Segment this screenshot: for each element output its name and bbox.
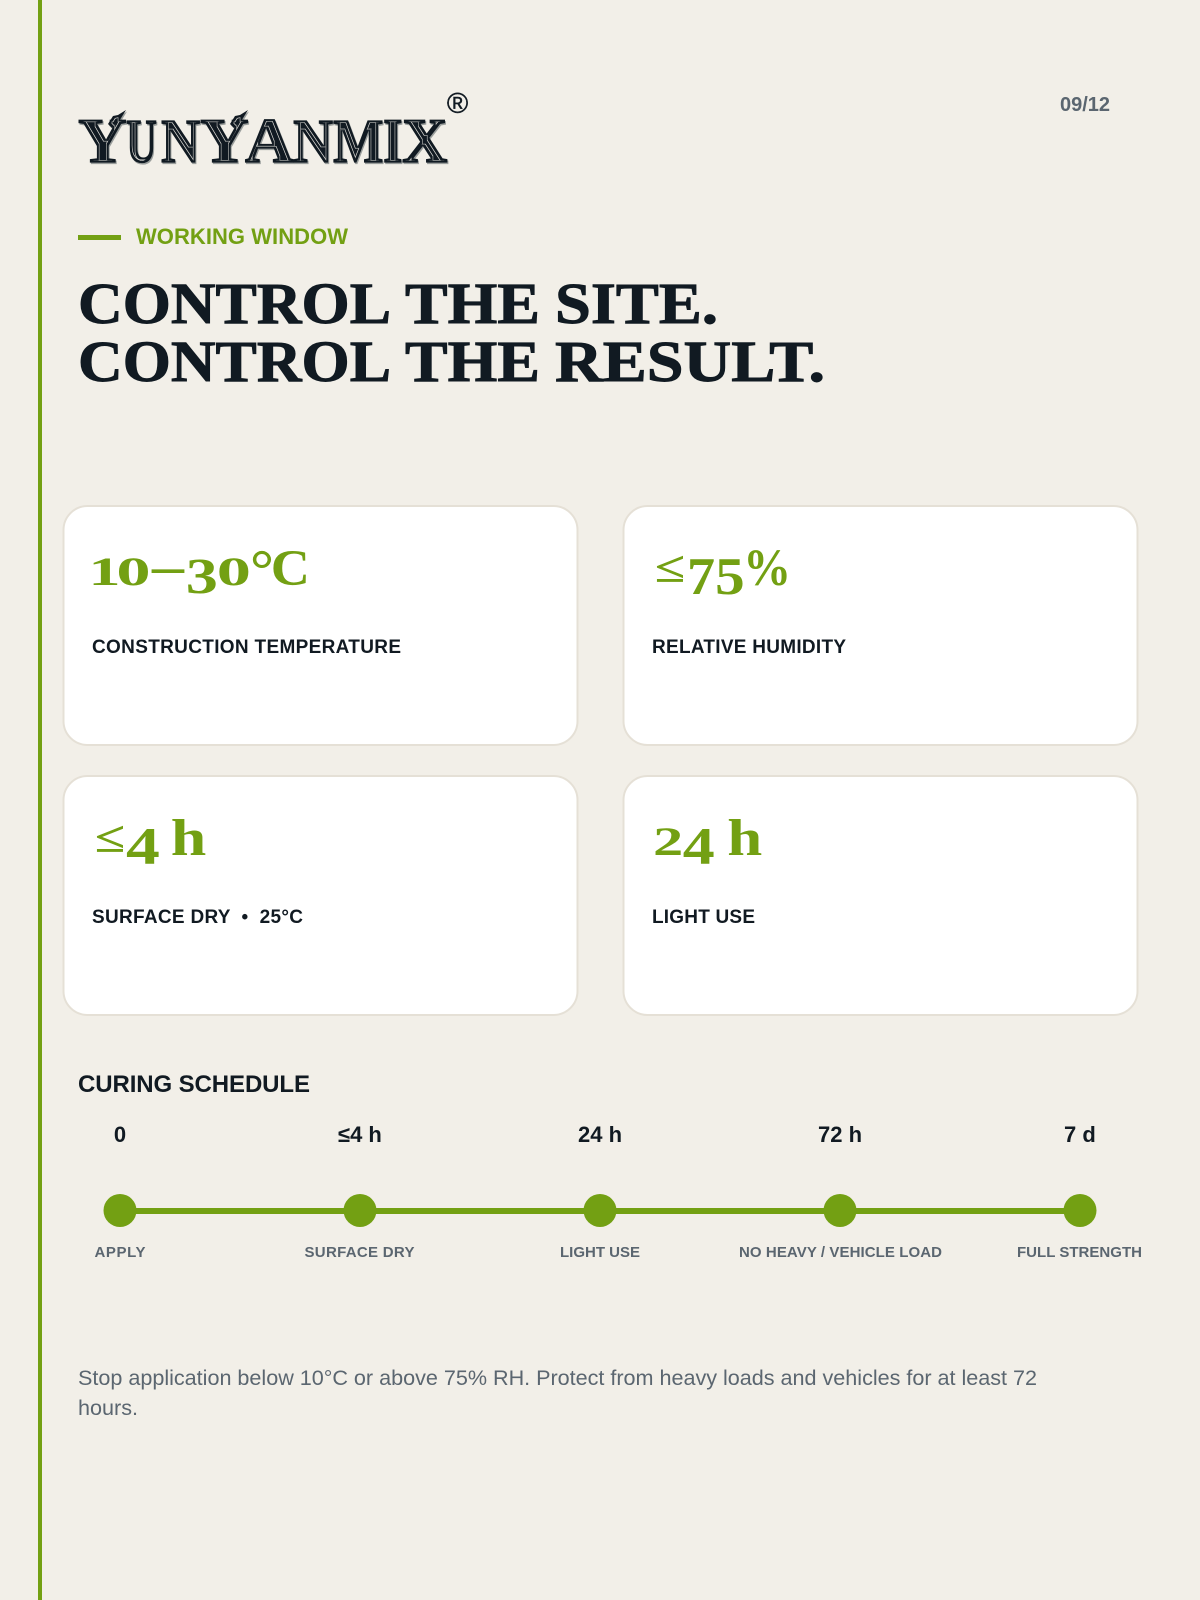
footnote: hours.: [78, 1395, 138, 1420]
title: SITE.: [555, 271, 718, 336]
page number: 09/12: [1060, 94, 1110, 116]
step: light use: [560, 1122, 640, 1261]
footnote: Stop application below 10°C or above 75% RH. Protect from heavy loads and vehicles for at least 72: [78, 1365, 1037, 1390]
label: LIGHT USE: [652, 907, 755, 928]
card: construction temperature: [64, 506, 578, 745]
value: [653, 810, 762, 876]
registered mark: ®: [447, 88, 468, 120]
label: CONSTRUCTION TEMPERATURE: [92, 637, 401, 658]
logo wordmark: I: [383, 107, 403, 176]
eyebrow rule: [78, 235, 121, 240]
value: 1: [88, 549, 121, 594]
step: apply: 0: [114, 1122, 126, 1147]
eyebrow label: WORKING WINDOW: [136, 224, 348, 249]
step: no heavy load: NO HEAVY / VEHICLE LOAD: [739, 1244, 942, 1261]
value: 2: [653, 820, 683, 864]
logo wordmark: A: [245, 107, 294, 176]
curing schedule heading: CURING SCHEDULE: [78, 1071, 310, 1098]
card: surface dry: [64, 776, 578, 1015]
value: 3: [186, 548, 218, 605]
logo wordmark: Y: [200, 107, 249, 176]
value: 4: [126, 818, 160, 876]
step: no heavy load: 72 h: [818, 1122, 862, 1147]
step: surface dry: SURFACE DRY: [304, 1244, 414, 1261]
value: [95, 809, 206, 876]
value: [88, 537, 310, 605]
value: [655, 538, 791, 606]
logo wordmark: N: [161, 106, 200, 176]
value: 5: [715, 548, 745, 606]
title: THE: [405, 271, 540, 336]
step: light use: 24 h: [578, 1122, 622, 1147]
title: [78, 271, 825, 394]
value: 4: [683, 817, 715, 876]
step: light use: LIGHT USE: [560, 1244, 640, 1261]
step: no heavy load: [739, 1122, 942, 1261]
value: –: [151, 537, 185, 595]
logo wordmark: Y: [78, 107, 127, 176]
value: 0: [116, 550, 151, 594]
value: %: [743, 538, 791, 596]
step: full strength: FULL STRENGTH: [1017, 1244, 1142, 1261]
step: surface dry: [304, 1122, 414, 1261]
step: full strength: 7 d: [1064, 1122, 1096, 1147]
value: ≤: [655, 542, 685, 591]
value: h: [171, 809, 206, 867]
footnote: [78, 1365, 1037, 1420]
title: RESULT.: [555, 329, 825, 394]
title: THE: [405, 329, 540, 394]
timeline line: [120, 1208, 1080, 1214]
step: full strength: [1017, 1122, 1142, 1261]
value: C: [271, 541, 310, 597]
curing timeline: [94, 1122, 1142, 1261]
value: h: [727, 810, 762, 867]
label: RELATIVE HUMIDITY: [652, 637, 846, 658]
card: light use: [624, 776, 1138, 1015]
label: SURFACE DRY • 25°C: [92, 907, 303, 928]
step: apply: [94, 1122, 146, 1261]
title: CONTROL: [78, 271, 391, 336]
value: °: [250, 538, 274, 601]
step: surface dry: ≤4 h: [338, 1122, 382, 1147]
logo wordmark: [78, 106, 448, 176]
logo wordmark: N: [293, 106, 333, 176]
value: 7: [687, 546, 715, 606]
value: ≤: [95, 812, 125, 861]
left accent bar: [38, 0, 42, 1600]
title: CONTROL: [78, 329, 391, 394]
value: 0: [217, 550, 251, 594]
logo wordmark: X: [402, 106, 448, 176]
step: apply: APPLY: [94, 1244, 146, 1261]
card: relative humidity: [624, 506, 1138, 745]
logo wordmark: U: [126, 106, 157, 176]
logo wordmark: M: [333, 106, 384, 176]
brand logo: [78, 88, 468, 176]
